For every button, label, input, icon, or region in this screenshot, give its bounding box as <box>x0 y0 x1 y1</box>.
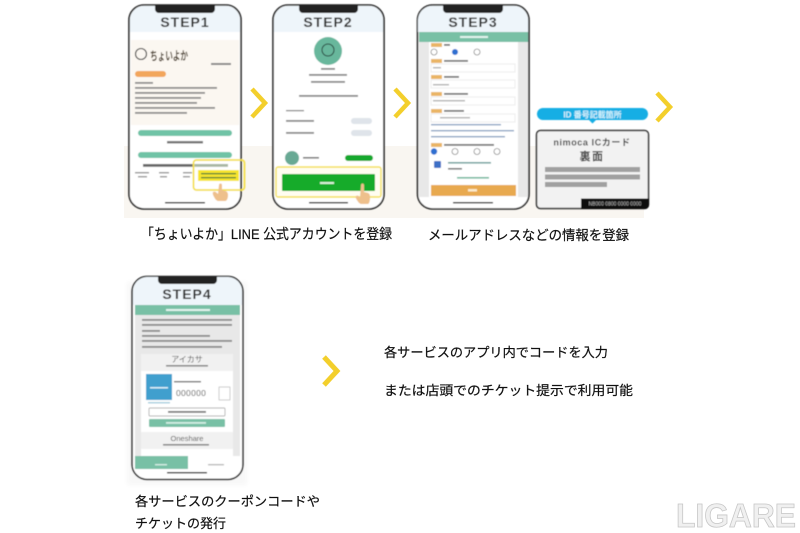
icon: service logo tile <box>146 374 172 400</box>
caption: coupon code issuing: チケットの発行 <box>135 516 226 531</box>
panel: nimoca IC card back: NB000 0800 0000 0000 <box>589 202 642 208</box>
panel: step 2 phone <box>273 5 384 209</box>
service name: Oneshare: Oneshare <box>171 434 203 443</box>
beige background band <box>124 146 644 218</box>
text: or show ticket in store: または店頭でのチケット提示で利用可能 <box>384 383 633 398</box>
highlight: yellow box <box>194 160 244 190</box>
intro text lines <box>135 82 217 114</box>
icon: round logo <box>314 37 342 65</box>
panel: nimoca IC card back: 裏面 <box>580 149 604 163</box>
panel: nimoca IC card back <box>536 130 649 209</box>
logo: ちょいよか: ちょいよか <box>150 49 188 63</box>
caption: coupon code issuing <box>135 494 320 531</box>
arrow: step 3 to next <box>657 93 670 121</box>
arrow: step 4 to usage <box>324 357 337 385</box>
logo: ちょいよか <box>136 48 188 63</box>
icon: pointing hand <box>356 184 370 204</box>
caption: LINE registration: 「ちょいよか」LINE 公式アカウントを登録 <box>141 226 392 242</box>
panel: step 4 phone <box>127 276 247 485</box>
highlight: yellow box with green button <box>276 167 381 197</box>
icon: pointing hand <box>213 184 228 201</box>
arrow: step 1 to step 2 <box>252 89 265 117</box>
heading: STEP2: STEP2 <box>303 14 353 30</box>
arrow: step 2 to step 3 <box>395 89 408 117</box>
caption: info registration: メールアドレスなどの情報を登録 <box>428 228 630 243</box>
heading: STEP4: STEP4 <box>162 286 212 302</box>
coupon code: 000000 <box>176 388 206 398</box>
panel: nimoca IC card back: nimoca ICカード <box>553 138 631 148</box>
panel: step 3 phone <box>418 5 529 209</box>
callout: ID number location label: ID 番号記載箇所 <box>563 110 622 120</box>
heading: STEP1: STEP1 <box>160 14 210 30</box>
caption: coupon code issuing: 各サービスのクーポンコードや <box>135 494 320 509</box>
form fields <box>431 43 516 196</box>
panel: step 1 phone <box>129 5 244 209</box>
text: enter the code in the app: 各サービスのアプリ内でコードを入力 <box>384 345 608 360</box>
callout: ID number location label <box>537 108 648 124</box>
service name: アイカサ: アイカサ <box>171 355 203 364</box>
heading: STEP3: STEP3 <box>448 14 498 30</box>
